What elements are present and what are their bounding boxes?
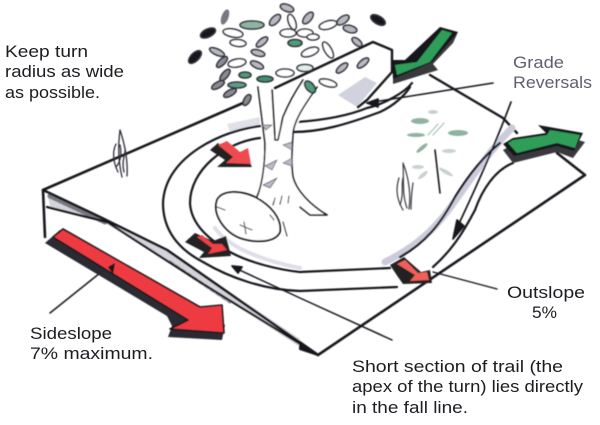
trail edges xyxy=(163,83,513,291)
rock xyxy=(216,192,289,241)
label: grade: Grade xyxy=(513,53,564,72)
foliage xyxy=(187,2,387,107)
red arrow upper trail xyxy=(210,141,252,167)
green arrow exiting xyxy=(503,125,585,163)
tree xyxy=(257,80,327,215)
callout: short section line 2: apex of the turn) lies directly xyxy=(352,377,584,396)
slab: sloped ground block xyxy=(43,75,585,355)
label: reversals: Reversals xyxy=(513,73,592,92)
label: radius as wide: radius as wide xyxy=(5,62,124,81)
red arrow apex xyxy=(185,233,231,258)
label: 7% maximum: 7% maximum. xyxy=(30,344,153,363)
red outslope arrow xyxy=(390,257,432,284)
grass tuft left xyxy=(114,130,127,177)
big red sideslope arrow xyxy=(45,229,225,340)
flow arrow lines and leaders xyxy=(50,83,511,340)
label: 5%: 5% xyxy=(532,303,557,322)
label: outslope: Outslope xyxy=(507,283,585,302)
sapling xyxy=(407,110,468,193)
grass tuft right xyxy=(397,163,413,210)
green arrow entering xyxy=(392,27,458,84)
label: as possible: as possible. xyxy=(5,83,100,102)
callout: short section line 1: Short section of trail (the xyxy=(352,357,563,376)
switchback trail diagram xyxy=(43,2,585,355)
callout: short section line 3: in the fall line. xyxy=(352,398,468,417)
label: sideslope: Sideslope xyxy=(30,324,112,343)
label: keep turn radius: Keep turn xyxy=(5,42,88,61)
hill with grade reversal xyxy=(215,42,512,268)
